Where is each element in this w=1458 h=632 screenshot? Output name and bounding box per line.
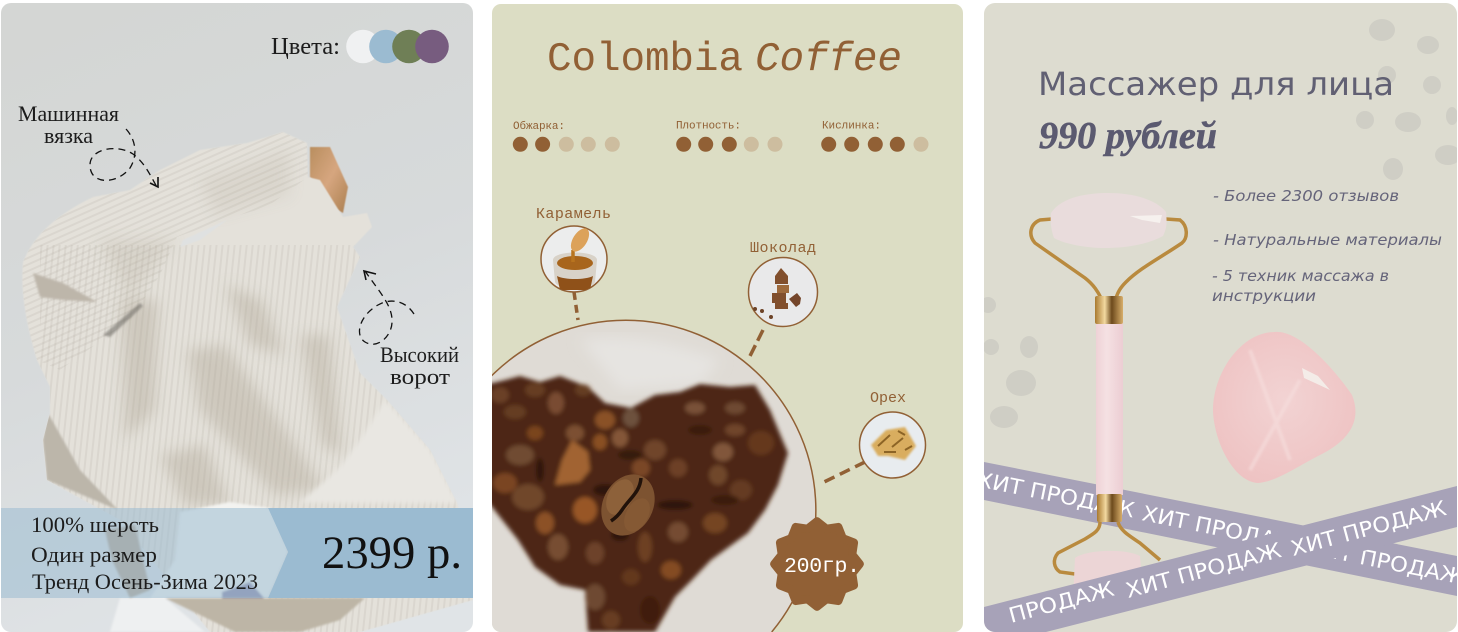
ribbon: front: ХИТ ПРОДАЖ [1123, 538, 1284, 603]
icon: coffee bean [601, 474, 655, 536]
title: Массажер для лица [1038, 65, 1394, 103]
ribbon: front [984, 486, 1457, 632]
band text: features: Тренд Осень-Зима 2023 [32, 569, 258, 594]
rating: density [676, 120, 782, 152]
panel: sweater card [1, 3, 473, 632]
connector dashes [574, 292, 865, 483]
label: machine knit: вязка [44, 123, 93, 148]
photo: coffee heart circle [492, 320, 817, 632]
rating: density: Плотность: [676, 120, 741, 132]
ribbon: front: ПРОДАЖ [1006, 577, 1117, 628]
ribbon: back: ХИТ ПРОДАЖ [1140, 501, 1302, 557]
badge: weight: 200гр. [784, 555, 860, 579]
rating: acidity: Кислинка: [822, 120, 881, 132]
price band [1, 508, 473, 598]
feature list: - Натуральные материалы [1213, 231, 1442, 249]
flavor: chocolate: Шоколад [750, 240, 816, 257]
feature list: - 5 техник массажа в [1212, 267, 1389, 285]
photo: jade roller [1031, 193, 1186, 600]
price: 990 рублей [1039, 115, 1217, 157]
flavor: nut [860, 390, 926, 478]
flavor: nut: Орех [870, 390, 906, 407]
title: Colombia [547, 37, 743, 83]
title: Coffee [755, 37, 902, 83]
flavor: caramel [536, 206, 611, 292]
band text: features: Один размер [31, 542, 157, 567]
band text: features: 100% шерсть [31, 512, 159, 537]
label: high collar [380, 346, 459, 388]
rating: acidity [821, 120, 928, 152]
photo: sweater model [1, 3, 473, 632]
feature list: - Более 2300 отзывов [1213, 187, 1399, 205]
colors label: Цвета: [271, 34, 340, 60]
band text: features [31, 512, 258, 594]
color swatches [346, 30, 449, 63]
arrow: dashed loop to collar [359, 271, 414, 344]
decorative pebbles [980, 19, 1458, 428]
ribbon: front: ХИТ ПРОДАЖ [1288, 496, 1449, 561]
badge: weight [774, 521, 860, 607]
photo: rose quartz stone [1213, 332, 1355, 483]
label: machine knit [18, 106, 119, 143]
flavor: chocolate [748, 240, 818, 326]
price: 2399 р. [322, 527, 462, 579]
title [549, 40, 900, 70]
rating: roast: Обжарка: [513, 120, 565, 133]
panel: massager card [975, 3, 1458, 632]
panel: coffee card [492, 4, 963, 632]
ribbon: back: ХИТ ПРОДАЖ [975, 467, 1137, 523]
feature list: инструкции [1212, 287, 1316, 305]
label: machine knit: Машинная [18, 101, 119, 126]
ribbon: back [975, 462, 1458, 596]
label: high collar: Высокий [380, 342, 459, 367]
flavor: caramel: Карамель [536, 206, 611, 223]
arrow: dashed loop to sleeve [90, 129, 158, 187]
feature list [1212, 187, 1442, 305]
label: high collar: ворот [390, 364, 450, 389]
ribbon: back: ХИТ ПРОДАЖ [1305, 534, 1458, 590]
rating: roast [513, 120, 620, 152]
